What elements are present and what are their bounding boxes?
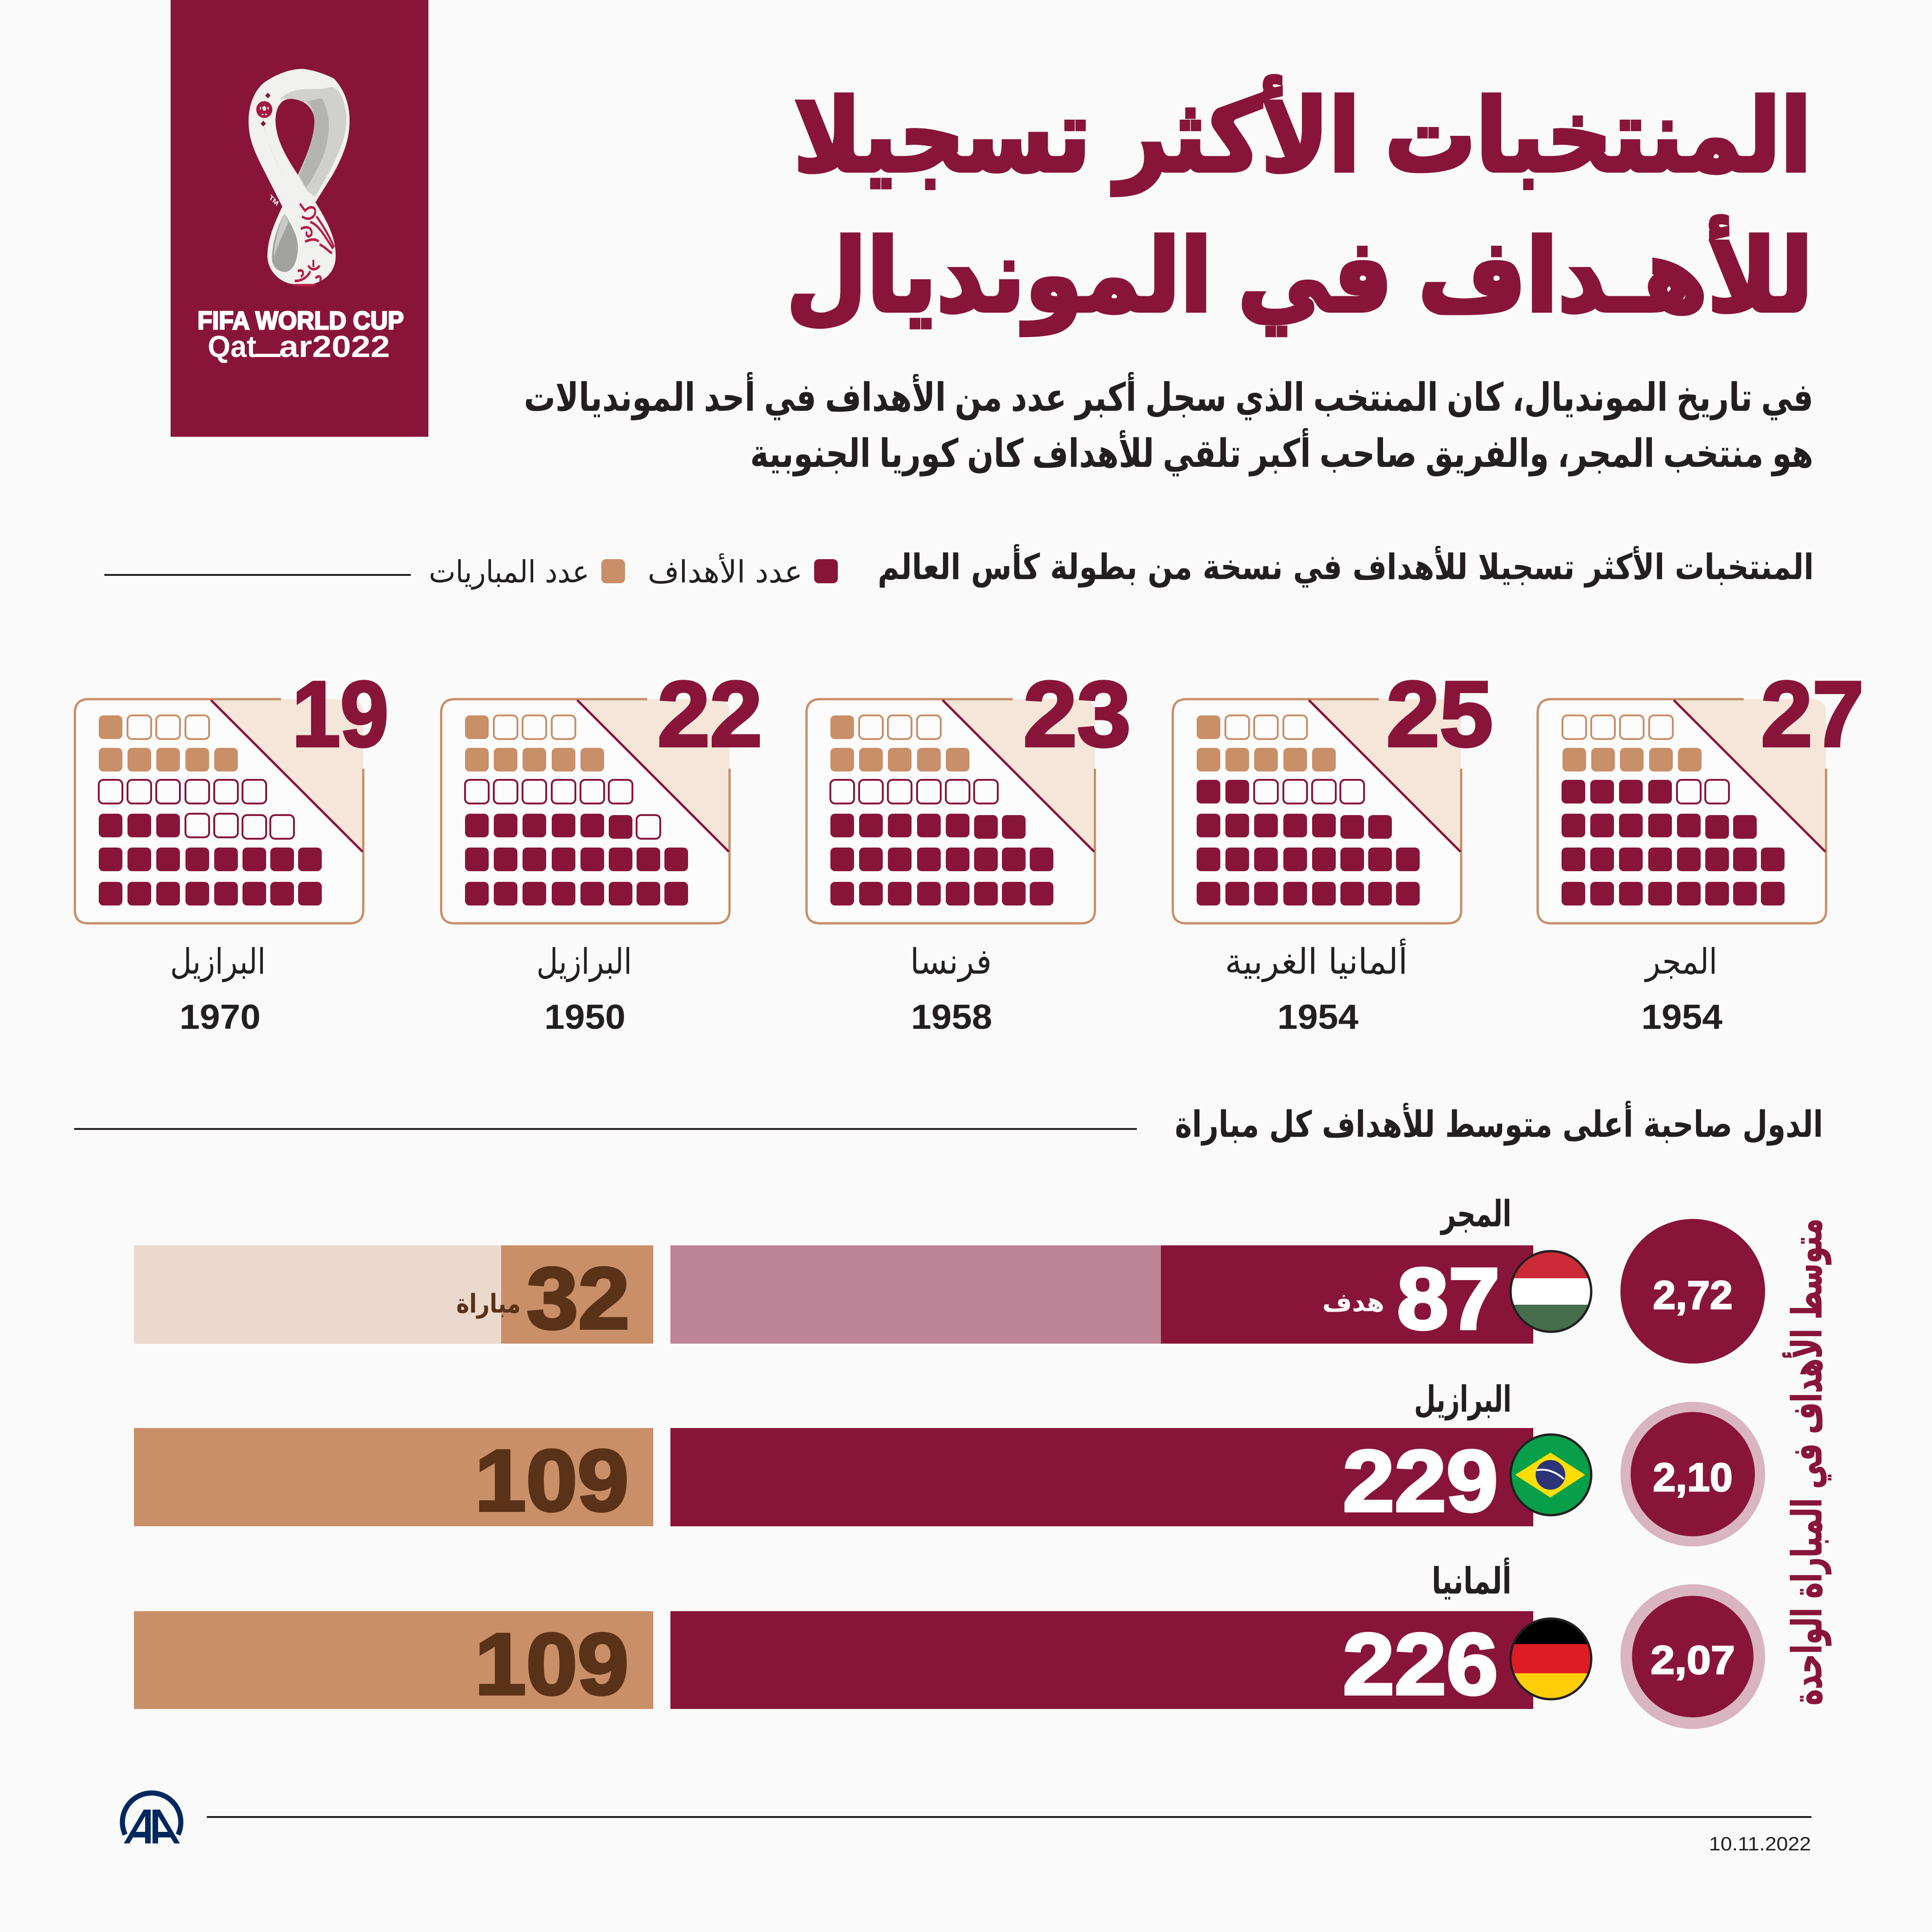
country name: البرازيل [536,941,632,982]
average circle [1620,1219,1765,1364]
year: 1950 [544,997,625,1036]
logo text: Qatar2022: ar2022 [279,329,390,363]
country name: فرنسا [910,941,992,982]
row: Brazil [134,1379,1765,1547]
card grid [807,699,1095,924]
legend item: matches: عدد المباريات [429,554,589,590]
matches bar [134,1428,653,1529]
legend item: goals: عدد الأهداف [648,553,803,590]
matches bar: 109 [475,1432,629,1529]
year: 1958 [911,997,992,1036]
goals bar [670,1428,1533,1530]
panel: FIFA World Cup Qatar 2022 logo [171,0,428,437]
country name: البرازيل [170,941,266,982]
goals number: 19 [292,663,389,766]
goals number: 23 [1023,663,1131,766]
title [786,76,1813,335]
goals bar: هدف [1322,1288,1384,1318]
country name: المجر [1644,941,1717,982]
country name: البرازيل [1414,1379,1511,1421]
icon: Anadolu Agency logo [122,1793,181,1843]
card grid [1537,699,1826,924]
flag: Germany [1510,1617,1592,1701]
goals number: 22 [657,663,762,766]
flag: Hungary [1510,1250,1592,1333]
country name: ألمانيا الغربية [1225,938,1408,982]
icon: figure-eight emblem [249,69,350,285]
title: المنتخبات الأكثر تسجيلا [794,76,1811,195]
matches bar: 32 [527,1250,630,1347]
average circle: 2,10 [1653,1455,1733,1500]
card grid [441,699,730,924]
TM mark: TM [268,193,280,208]
goals bar: 226 [1343,1615,1498,1713]
row: Germany [134,1557,1765,1729]
goals bar [670,1245,1533,1347]
average circle: 2,72 [1653,1273,1733,1318]
matches bar [134,1245,653,1347]
logo text: Qatar2022: Qat [208,329,256,363]
goals bar: 87 [1397,1250,1500,1347]
goals bar [670,1611,1533,1713]
legend [429,553,838,590]
logo text: Qatar2022 [208,329,390,363]
panel: Hungary 1954 [1537,663,1864,1036]
panel: Brazil 1950 [441,663,762,1036]
average circle: 2,07 [1651,1638,1735,1683]
intro text block [524,372,1813,477]
average circle [1620,1402,1765,1547]
date: 10.11.2022 [1709,1833,1811,1855]
matches bar: 109 [475,1615,629,1713]
card grid [75,699,363,924]
logo text: FIFA WORLD CUP: FIFA WORLD CUP [198,306,404,335]
panel: Brazil 1970 [75,663,389,1036]
country name: المجر [1440,1193,1511,1235]
panel: West Germany 1954 [1173,663,1493,1036]
title: للأهـداف في المونديال [786,216,1813,335]
flag: Brazil [1511,1435,1591,1515]
year: 1970 [179,997,261,1036]
year: 1954 [1277,997,1358,1036]
goals number: 27 [1761,663,1864,766]
country name: ألمانيا [1432,1557,1511,1602]
matches bar [134,1611,653,1713]
matches bar: مباراة [456,1289,521,1319]
goals bar: 229 [1343,1432,1498,1530]
year: 1954 [1641,997,1722,1036]
goals number: 25 [1386,663,1493,766]
card grid [1173,699,1461,924]
row: Hungary [134,1193,1765,1364]
average circle [1620,1584,1765,1729]
panel: France 1958 [807,663,1131,1036]
vertical axis label: average goals per match: متوسط الأهداف في المباراة الواحدة [1782,1218,1831,1705]
